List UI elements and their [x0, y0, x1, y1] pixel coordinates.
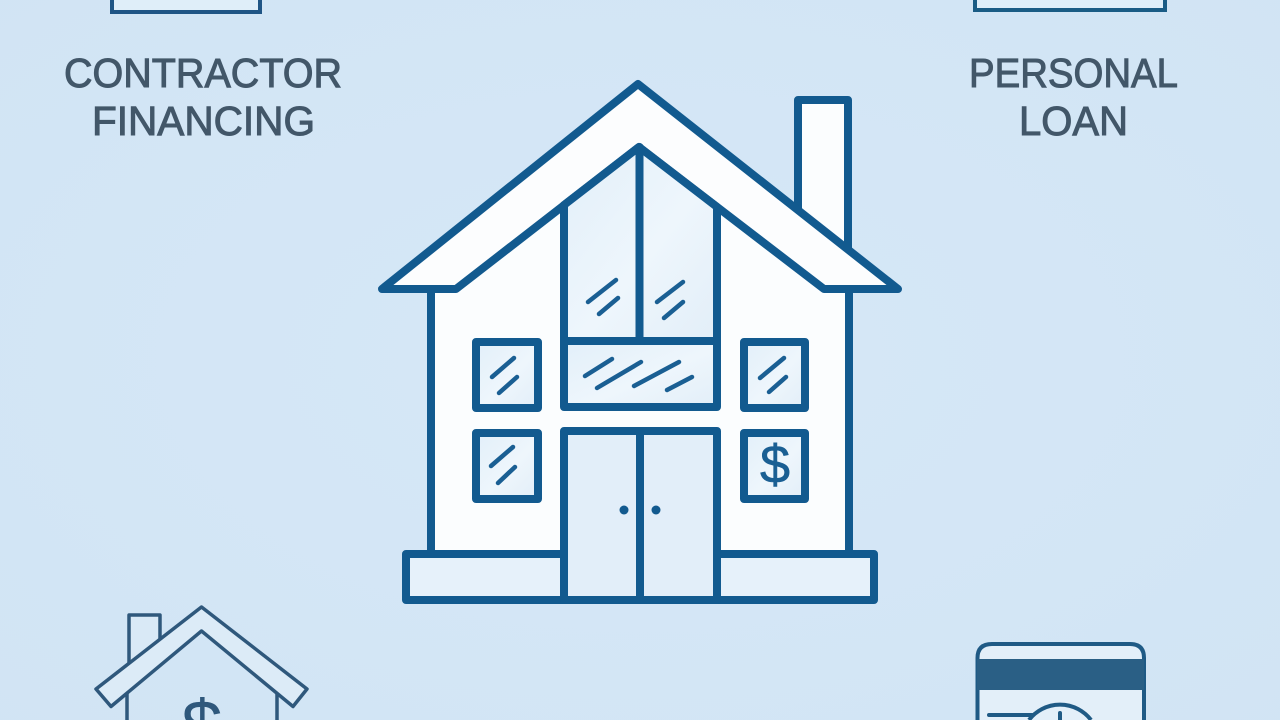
window: lower right with dollar sign: [744, 433, 805, 499]
icon: contractor financing (cropped): [112, 0, 260, 12]
label: personal loan: LOAN: [1019, 98, 1128, 144]
double door: [564, 431, 717, 600]
icon: card with clock (cropped): [977, 644, 1144, 720]
label: contractor financing: [64, 50, 342, 144]
window: upper left: [476, 342, 538, 408]
transom window: [564, 341, 717, 407]
label: personal loan: [969, 50, 1178, 144]
foundation step: [406, 554, 874, 600]
window: lower right with dollar sign: $: [760, 435, 790, 495]
central house illustration: [382, 84, 898, 600]
label: contractor financing: CONTRACTOR: [64, 50, 342, 96]
chimney: [798, 100, 848, 250]
label: personal loan: PERSONAL: [969, 50, 1178, 96]
window: lower left: [476, 433, 538, 499]
icon: personal loan (cropped): [975, 0, 1165, 10]
roof: [382, 84, 898, 289]
gable window: [564, 147, 717, 341]
house wall: [431, 147, 849, 552]
label: contractor financing: FINANCING: [92, 98, 315, 144]
window: upper right: [744, 342, 805, 408]
icon: small house (cropped): [96, 607, 307, 720]
